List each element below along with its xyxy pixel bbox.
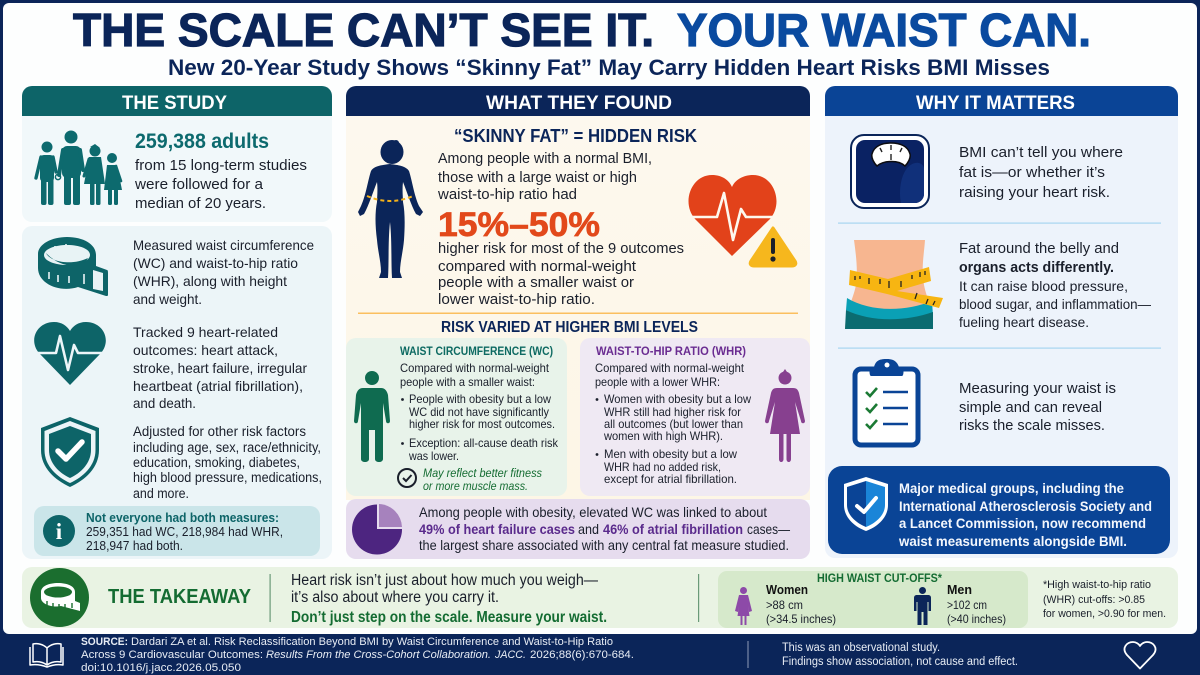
whr cut-off footnote: [1043, 579, 1166, 620]
wc note: [423, 466, 542, 493]
why text: measuring: risks the scale misses.: [959, 417, 1105, 434]
callout text: Among people with obesity, elevated WC was linked to about: [419, 504, 767, 520]
callout: attributable share: [346, 499, 810, 559]
study follow-up text: [134, 157, 307, 212]
why text: bmi: fat is—or whether it’s: [959, 164, 1105, 181]
icon: shield check: [41, 417, 99, 487]
icon: info: [43, 515, 75, 547]
card: high waist cut-offs: [718, 571, 1028, 628]
icon: open book: [30, 644, 63, 667]
men values: (>40 inches): [947, 612, 1006, 626]
orange divider: [358, 312, 798, 314]
measures text: Measured waist circumference: [133, 237, 314, 253]
wc note: May reflect better fitness: [423, 466, 542, 480]
found heading: WHAT THEY FOUND: [486, 92, 672, 114]
footer: [30, 636, 1155, 674]
callout text: a Lancet Commission, now recommend: [899, 516, 1146, 531]
outcomes text: stroke, heart failure, irregular: [133, 360, 307, 376]
adjustment text: Adjusted for other risk factors: [133, 424, 306, 439]
source citation: JACC.: [494, 649, 526, 661]
icon: woman: [735, 587, 752, 625]
whr cut-off footnote: *High waist-to-hip ratio: [1043, 579, 1151, 591]
wc text: [400, 361, 559, 463]
finding text: waist-to-hip ratio had: [437, 186, 577, 203]
why text: measuring: [959, 380, 1116, 434]
finding comparison text: higher risk for most of the 9 outcomes: [438, 240, 684, 257]
why text: measuring: Measuring your waist is: [959, 380, 1116, 397]
callout text: 259,351 had WC, 218,984 had WHR,: [86, 524, 283, 539]
title: [73, 4, 1091, 56]
wc text: Exception: all-cause death risk: [409, 436, 559, 450]
study summary card: [22, 116, 332, 222]
study follow-up text: median of 20 years.: [135, 195, 266, 212]
icon: female figure: [765, 369, 805, 462]
study methods card: [22, 226, 332, 559]
study heading: THE STUDY: [122, 92, 227, 114]
adjustment text: high blood pressure, medications,: [133, 470, 322, 485]
wc heading: WAIST CIRCUMFERENCE (WC): [400, 344, 553, 358]
women values: >88 cm: [766, 598, 803, 612]
panel: why it matters: [825, 86, 1178, 558]
outcomes text: [133, 324, 307, 411]
found background: [346, 116, 810, 500]
finding comparison text: lower waist-to-hip ratio.: [438, 291, 595, 308]
found heading: [346, 86, 810, 116]
finding comparison text: [438, 240, 684, 308]
source citation: Across 9 Cardiovascular Outcomes:: [81, 649, 263, 661]
callout text: the largest share associated with any central fat measure studied.: [419, 537, 789, 553]
outcomes text: heartbeat (atrial fibrillation),: [133, 378, 303, 394]
key stat: 15 to 50 percent: 15%–50%: [438, 206, 600, 244]
whr text: Women with obesity but a low: [604, 392, 751, 406]
observational study note: This was an observational study.: [782, 642, 940, 654]
callout text: cases—: [747, 521, 790, 537]
icon: heart outline: [1125, 642, 1155, 668]
icon: heart with warning: [688, 175, 796, 266]
adjustment text: including age, sex, race/ethnicity,: [133, 440, 321, 455]
callout: sample sizes: [34, 506, 320, 556]
icon: bathroom scale: [851, 135, 929, 208]
finding comparison text: people with a smaller waist or: [438, 274, 634, 291]
outcomes text: outcomes: heart attack,: [133, 342, 278, 358]
wc text: Compared with normal-weight: [400, 361, 550, 375]
card: waist-to-hip ratio: [580, 338, 810, 496]
callout: medical groups: [828, 466, 1170, 554]
whr cut-off footnote: for women, >0.90 for men.: [1043, 608, 1166, 620]
callout text: [86, 510, 283, 553]
callout text: 49% of heart failure cases: [419, 521, 575, 537]
whr cut-off footnote: (WHR) cut-offs: >0.85: [1043, 594, 1145, 606]
takeaway text: it’s also about where you carry it.: [291, 589, 499, 606]
callout text: Not everyone had both measures:: [86, 510, 279, 525]
why text: measuring: simple and can reveal: [959, 399, 1102, 416]
study heading: [22, 86, 332, 116]
pie chart: [352, 504, 402, 554]
measures text: (WC) and waist-to-hip ratio: [133, 255, 298, 271]
whr text: WHR had no added risk,: [604, 460, 721, 474]
subheading: risk varied: RISK VARIED AT HIGHER BMI LEVELS: [441, 319, 698, 336]
why heading: WHY IT MATTERS: [916, 92, 1075, 114]
takeaway text: [291, 572, 607, 626]
icon: shield: [844, 477, 888, 531]
men values: Men: [947, 582, 972, 597]
icon: belly with tape: [845, 240, 943, 329]
whr text: except for atrial fibrillation.: [604, 472, 737, 486]
adjustment text: and more.: [133, 486, 189, 501]
icon: measuring tape: [38, 237, 108, 296]
panel: the takeaway: [22, 567, 1178, 628]
key stat: participants: 259,388 adults: [135, 130, 269, 153]
title: YOUR WAIST CAN.: [677, 4, 1091, 56]
wc text: people with a smaller waist:: [400, 375, 535, 389]
why text: bmi: raising your heart risk.: [959, 184, 1110, 201]
source citation: Dardari ZA et al. Risk Reclassification Beyond BMI by Waist Circumference and Waist-to-Hip Ratio: [131, 636, 613, 648]
men values: [947, 582, 1006, 626]
women values: [766, 582, 836, 626]
icon: family: [36, 130, 122, 205]
study follow-up text: were followed for a: [134, 176, 264, 193]
men values: >102 cm: [947, 598, 987, 612]
callout text: International Atherosclerosis Society and: [899, 499, 1152, 514]
outcomes text: Tracked 9 heart-related: [133, 324, 278, 340]
subtitle: New 20-Year Study Shows “Skinny Fat” May Carry Hidden Heart Risks BMI Misses: [168, 55, 1050, 80]
icon: info: i: [56, 519, 63, 544]
observational study note: [782, 642, 1018, 668]
callout text: [419, 504, 790, 553]
finding comparison text: compared with normal-weight: [438, 258, 637, 275]
cut-offs heading: HIGH WAIST CUT-OFFS*: [817, 571, 942, 585]
adjustment text: [133, 424, 322, 501]
why text: belly fat: It can raise blood pressure,: [959, 278, 1128, 294]
takeaway heading: THE TAKEAWAY: [108, 586, 252, 608]
why text: belly fat: blood sugar, and inflammation—: [959, 296, 1151, 312]
finding text: those with a large waist or high: [438, 169, 637, 186]
why text: belly fat: organs acts differently.: [959, 259, 1114, 276]
card: waist circumference: [346, 338, 567, 496]
source citation: 2026;88(6):670-684.: [530, 649, 634, 661]
icon: male figure: [354, 371, 390, 462]
women values: (>34.5 inches): [766, 612, 836, 626]
wc note: or more muscle mass.: [423, 479, 528, 493]
why text: belly fat: fueling heart disease.: [959, 314, 1089, 330]
icon: clipboard checklist: [855, 359, 918, 445]
finding text: Among people with a normal BMI,: [438, 150, 652, 167]
wc text: was lower.: [408, 449, 459, 463]
whr text: WHR still had higher risk for: [604, 405, 741, 419]
panel: the study: [22, 86, 332, 559]
observational study note: Findings show association, not cause and effect.: [782, 656, 1018, 668]
subheading: skinny fat: “SKINNY FAT” = HIDDEN RISK: [454, 126, 697, 146]
icon: tape in green circle: [30, 568, 89, 627]
women values: Women: [766, 582, 808, 597]
source citation: [81, 636, 634, 674]
icon: man: [914, 587, 931, 625]
whr heading: WAIST-TO-HIP RATIO (WHR): [596, 344, 746, 358]
title: THE SCALE CAN’T SEE IT.: [73, 4, 654, 56]
wc text: People with obesity but a low: [409, 392, 551, 406]
study follow-up text: from 15 long-term studies: [135, 157, 307, 174]
why text: belly fat: [959, 240, 1151, 330]
whr text: Compared with normal-weight: [595, 361, 745, 375]
wc text: WC did not have significantly: [409, 405, 549, 419]
why text: belly fat: Fat around the belly and: [959, 240, 1119, 257]
callout text: [898, 481, 1152, 549]
adjustment text: education, smoking, diabetes,: [133, 455, 300, 470]
why text: bmi: BMI can’t tell you where: [959, 144, 1123, 161]
wc text: higher risk for most outcomes.: [409, 417, 555, 431]
takeaway text: Don’t just step on the scale. Measure your waist.: [291, 609, 607, 626]
icon: body silhouette: [358, 140, 423, 278]
measures text: [133, 237, 314, 307]
measures text: (WHR), along with height: [133, 273, 287, 289]
source citation: Results From the Cross-Cohort Collaboration.: [266, 649, 491, 661]
icon: heart with pulse: [34, 322, 106, 385]
measures text: and weight.: [133, 291, 202, 307]
whr text: all outcomes (but lower than: [604, 417, 743, 431]
icon: check circle: [398, 469, 416, 487]
whr text: [595, 361, 751, 486]
callout text: waist measurements alongside BMI.: [898, 534, 1127, 549]
callout text: Major medical groups, including the: [899, 481, 1124, 496]
outcomes text: and death.: [133, 395, 196, 411]
takeaway text: Heart risk isn’t just about how much you weigh—: [291, 572, 598, 589]
why background: [825, 116, 1178, 558]
callout text: 218,947 had both.: [86, 538, 183, 553]
whr text: Men with obesity but a low: [604, 447, 737, 461]
whr text: people with a lower WHR:: [595, 375, 720, 389]
whr text: women with high WHR).: [603, 429, 723, 443]
panel: what they found: [346, 86, 810, 559]
source citation: doi:10.1016/j.jacc.2026.05.050: [81, 662, 241, 674]
why heading: [825, 86, 1178, 116]
finding text: [437, 150, 652, 203]
why text: bmi: [959, 144, 1123, 201]
callout text: 46% of atrial fibrillation: [603, 521, 743, 537]
callout text: and: [578, 521, 599, 537]
source citation: SOURCE:: [81, 636, 128, 648]
